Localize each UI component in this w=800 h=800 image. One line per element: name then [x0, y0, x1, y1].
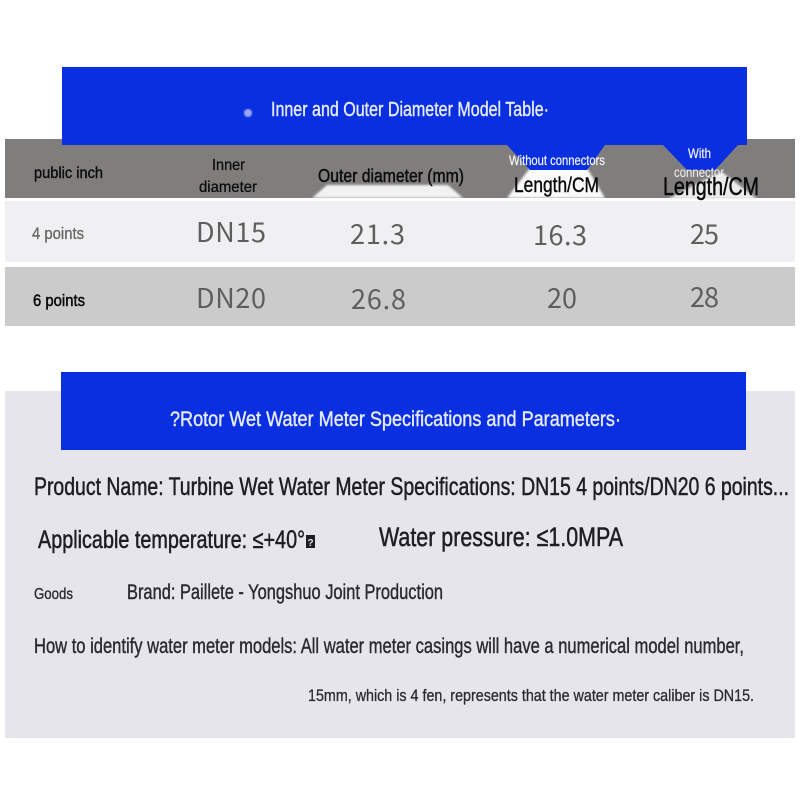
banner: inner and outer diameter	[62, 67, 747, 170]
table header band	[5, 139, 795, 199]
column heading: without connectors	[509, 152, 605, 197]
specifications background	[5, 391, 795, 738]
table row: 6 points: 20	[547, 277, 577, 316]
column heading: public inch: public inch	[34, 165, 103, 182]
column heading: inner diameter	[199, 157, 258, 196]
table row: 6 points: 28	[690, 276, 719, 315]
table row: 4 points: 21.3	[350, 213, 405, 252]
icon: glowing bullet	[244, 109, 252, 117]
column heading: inner diameter: diameter	[199, 179, 258, 196]
column heading: with connector: connector	[674, 164, 724, 180]
column heading: outer diameter: Outer diameter (mm)	[318, 166, 464, 186]
banner title: Inner and Outer Diameter Model Table·	[271, 99, 549, 121]
table row: 4 points: 4 points	[32, 224, 84, 243]
banner: rotor wet water meter	[61, 372, 746, 450]
column heading: inner diameter: Inner	[212, 157, 246, 174]
text: applicable temperature: Applicable temperature: ≤+40°	[38, 526, 305, 554]
text: goods label: Goods	[34, 586, 73, 603]
table row: 6 points: 6 points	[33, 291, 85, 310]
text: water pressure: Water pressure: ≤1.0MPA	[379, 522, 623, 552]
column heading: with connector: Length/CM	[663, 173, 759, 201]
table row: 4 points: 16.3	[533, 214, 587, 253]
text: brand: Brand: Paillete - Yongshuo Joint Production	[127, 581, 443, 604]
panel: diameter table	[5, 67, 795, 326]
text: applicable temperature: ?	[307, 538, 314, 549]
table row: 6 points	[5, 267, 795, 326]
table row: 4 points: DN15	[196, 211, 266, 250]
table row: 6 points: DN20	[196, 277, 266, 316]
panel: specifications	[5, 372, 795, 738]
table row: 4 points	[5, 201, 795, 262]
column heading: with connector	[663, 145, 759, 201]
table row: 6 points: 26.8	[351, 278, 406, 317]
column heading: without connectors: Length/CM	[514, 174, 599, 197]
column heading: without connectors: Without connectors	[509, 152, 605, 168]
banner: rotor wet water meter: ?Rotor Wet Water Meter Specifications and Parameters·	[170, 408, 621, 431]
column heading: with connector: With	[688, 145, 711, 161]
table row: 4 points: 25	[690, 213, 719, 252]
